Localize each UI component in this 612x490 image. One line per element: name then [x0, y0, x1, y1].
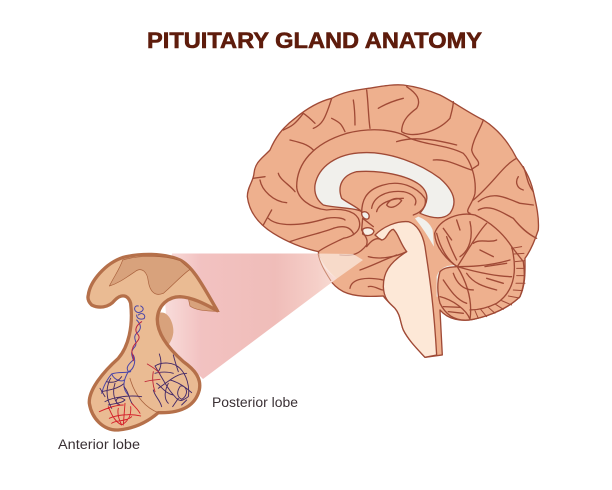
lobe divider	[130, 378, 158, 413]
cerebellum	[435, 214, 525, 320]
small lobe behind stalk	[158, 312, 173, 345]
pituitary gland	[88, 254, 219, 430]
corpus callosum white band	[315, 153, 454, 218]
gland outline	[88, 254, 217, 430]
label: anterior lobe: Anterior lobe	[58, 437, 140, 452]
red stalk vessels	[132, 322, 142, 361]
ventricle openings	[362, 212, 369, 219]
cortical sulci	[253, 87, 537, 290]
brain outline	[247, 85, 538, 357]
label: posterior lobe: Posterior lobe	[212, 395, 298, 410]
tail lobe	[188, 298, 219, 312]
zoom beam from brain to gland	[165, 254, 337, 379]
title: PITUITARY GLAND ANATOMY	[147, 28, 482, 53]
brain sagittal section	[247, 85, 538, 357]
posterior lobe capillaries	[153, 354, 192, 407]
highlighted hypophysis area on brain	[318, 254, 363, 281]
brainstem	[375, 222, 437, 357]
anterior lobe capillaries	[100, 377, 142, 408]
upper dark tissue	[109, 256, 190, 294]
blue portal vessels	[102, 306, 145, 395]
